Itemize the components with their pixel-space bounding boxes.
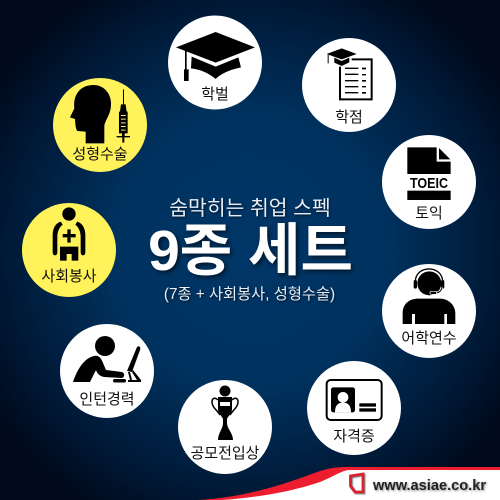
icon: TOEIC document [407,147,451,200]
circle: 성형수술 [53,78,147,172]
text: note: (7종 + 사회봉사, 성형수술) [164,286,335,303]
circle: 인턴경력 [60,324,154,418]
icon: graduation cap [176,32,255,81]
icon: trophy [212,386,238,440]
circle: 토익 [382,135,476,229]
circle: 자격증 [307,361,401,455]
footer band [198,467,500,500]
circle: 학벌 [168,16,262,110]
circle: 공모전입상 [178,380,272,474]
circle: 어학연수 [382,264,476,358]
circle: 사회봉사 [22,203,116,297]
circle: 학점 [302,38,396,132]
title: 9종 세트 [148,219,353,283]
icon: logo [350,474,363,492]
heading: subtitle top: 숨막히는 취업 스펙 [169,197,331,220]
label: 토익: 토익 [415,205,443,222]
label: 인턴경력: 인턴경력 [79,391,135,408]
label: 성형수술: 성형수술 [72,146,128,163]
label: 공모전입상: 공모전입상 [190,445,260,462]
label: 어학연수: 어학연수 [401,330,457,347]
icon: person at computer [73,336,141,382]
TOEIC text: TOEIC [410,175,448,192]
icon: person with headset [403,269,455,324]
icon: transcript with cap [327,48,372,99]
label: 사회봉사: 사회봉사 [41,268,97,285]
text: website: www.asiae.co.kr [372,477,486,494]
label: 학벌: 학벌 [201,86,229,103]
icon: person with cross [53,207,85,261]
icon: head and syringe [70,85,130,143]
label: 학점: 학점 [335,109,363,126]
label: 자격증: 자격증 [333,428,375,445]
icon: ID card [327,380,382,420]
